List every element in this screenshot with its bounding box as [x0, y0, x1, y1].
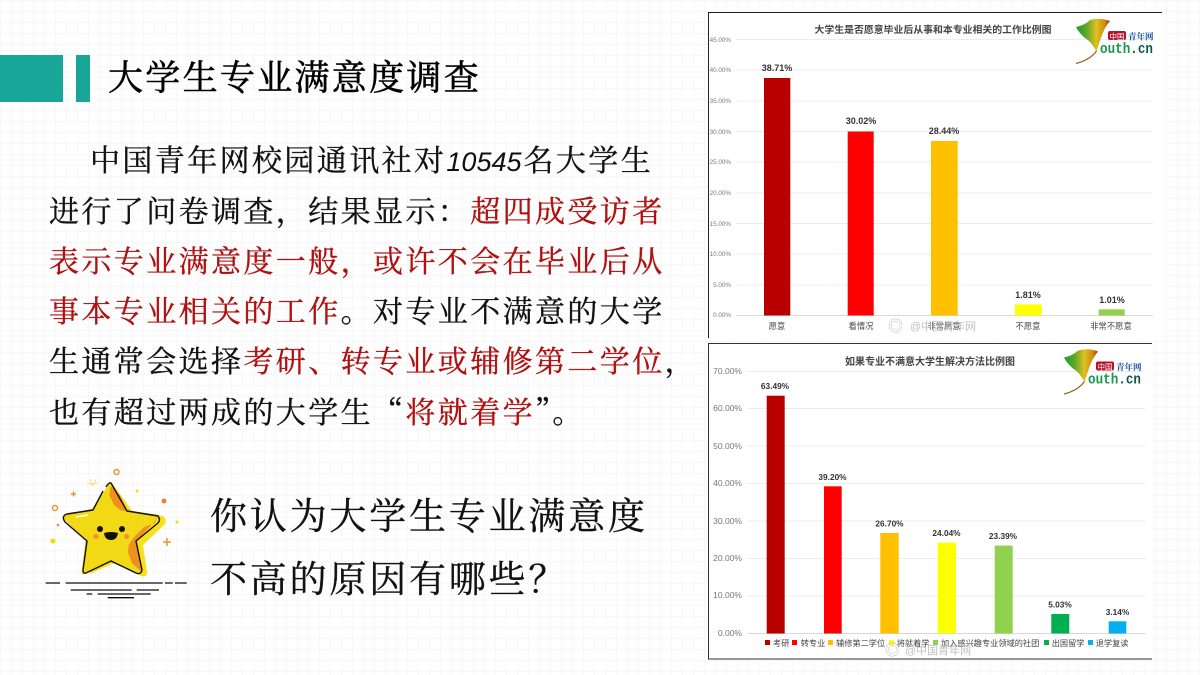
- bars: [767, 396, 1126, 634]
- chart: solutions when unsatisfied with major: [708, 343, 1152, 660]
- value labels: 30.02%: [846, 116, 876, 126]
- category labels: [769, 321, 1132, 331]
- y axis labels: [713, 366, 742, 638]
- legend: 出国留学: [1052, 638, 1084, 648]
- chart: willingness to work in related field: [708, 12, 1162, 338]
- y axis labels: 10.00%: [710, 251, 731, 258]
- watermark: @中国青年网: [905, 643, 971, 657]
- legend: [765, 638, 1128, 648]
- value labels: 1.81%: [1015, 290, 1041, 300]
- text block: survey summary: 中国青年网校园通讯社对10545名大学生: [90, 136, 653, 180]
- y axis labels: 50.00%: [713, 441, 742, 451]
- y axis labels: 70.00%: [713, 366, 742, 376]
- text block: survey summary: [49, 136, 697, 432]
- value labels: 23.39%: [989, 531, 1018, 541]
- logo: youth.cn: 青年网: [1128, 30, 1154, 42]
- value labels: 24.04%: [932, 528, 961, 538]
- y axis labels: 20.00%: [710, 190, 731, 197]
- watermark: ◎: [885, 642, 900, 659]
- legend: 加入感兴趣专业领域的社团: [941, 638, 1039, 648]
- value labels: 5.03%: [1048, 600, 1072, 610]
- category labels: 愿意: [769, 321, 785, 331]
- legend: 辅修第二学位: [836, 638, 885, 648]
- category labels: 不愿意: [1016, 321, 1040, 331]
- y axis labels: 40.00%: [713, 478, 742, 488]
- category labels: 非常愿意: [927, 321, 961, 331]
- value labels: 63.49%: [761, 381, 790, 391]
- text block: survey summary: 也有超过两成的大学生“将就着学”。: [49, 388, 585, 432]
- y axis labels: 35.00%: [710, 98, 731, 105]
- question text: [210, 486, 648, 603]
- y axis labels: 0.00%: [713, 312, 731, 319]
- legend: 将就着学: [897, 638, 929, 648]
- watermark: [888, 318, 976, 335]
- header accent blocks: [0, 55, 90, 102]
- y axis labels: 0.00%: [718, 628, 742, 638]
- y axis labels: 15.00%: [710, 221, 731, 228]
- text block: survey summary: 进行了问卷调查，结果显示：超四成受访者: [49, 187, 665, 231]
- value labels: 38.71%: [762, 63, 792, 73]
- text block: survey summary: 生通常会选择考研、转专业或辅修第二学位，: [49, 337, 697, 381]
- logo: youth.cn: [1064, 349, 1142, 394]
- value labels: 39.20%: [818, 472, 847, 482]
- legend: 考研: [773, 639, 789, 648]
- y axis labels: 40.00%: [710, 67, 731, 74]
- y axis labels: 30.00%: [710, 129, 731, 136]
- question text: 你认为大学生专业满意度: [210, 486, 648, 540]
- logo: youth.cn: outh.cn: [1100, 41, 1153, 58]
- value labels: 3.14%: [1106, 607, 1130, 617]
- category labels: 看情况: [849, 321, 874, 331]
- bars: [764, 78, 1125, 316]
- icon: smiling star: [46, 468, 187, 598]
- legend: 转专业: [801, 638, 825, 648]
- question text: 不高的原因有哪些？: [210, 549, 568, 603]
- value labels: 28.44%: [929, 126, 959, 136]
- watermark: ◎: [888, 318, 903, 335]
- logo: youth.cn: 中国: [1098, 362, 1112, 372]
- text block: survey summary: 表示专业满意度一般，或许不会在毕业后从: [49, 237, 665, 281]
- value labels: [761, 381, 1130, 617]
- y axis labels: [710, 37, 731, 319]
- legend: 退学复读: [1096, 638, 1128, 648]
- title: 大学生专业满意度调查: [108, 51, 481, 101]
- y axis labels: 45.00%: [710, 37, 731, 44]
- text block: survey summary: 事本专业相关的工作。对专业不满意的大学: [49, 287, 665, 331]
- y axis labels: 25.00%: [710, 159, 731, 166]
- logo: youth.cn: outh.cn: [1088, 372, 1141, 388]
- watermark: @中国青年网: [910, 319, 976, 333]
- value labels: 26.70%: [875, 518, 904, 528]
- y axis labels: 10.00%: [713, 590, 742, 600]
- logo: youth.cn: 青年网: [1116, 361, 1142, 373]
- value labels: [762, 63, 1125, 305]
- chart title: 大学生是否愿意毕业后从事和本专业相关的工作比例图: [814, 23, 1052, 36]
- y axis labels: 5.00%: [713, 282, 731, 289]
- value labels: 1.01%: [1099, 295, 1125, 305]
- y axis labels: 30.00%: [713, 516, 742, 526]
- y axis labels: 60.00%: [713, 403, 742, 413]
- y axis labels: 20.00%: [713, 553, 742, 563]
- chart title: 如果专业不满意大学生解决方法比例图: [845, 355, 1015, 368]
- category labels: 非常不愿意: [1090, 321, 1132, 331]
- logo: youth.cn: 中国: [1110, 31, 1124, 41]
- logo: youth.cn: [1076, 19, 1154, 63]
- watermark: [885, 642, 971, 659]
